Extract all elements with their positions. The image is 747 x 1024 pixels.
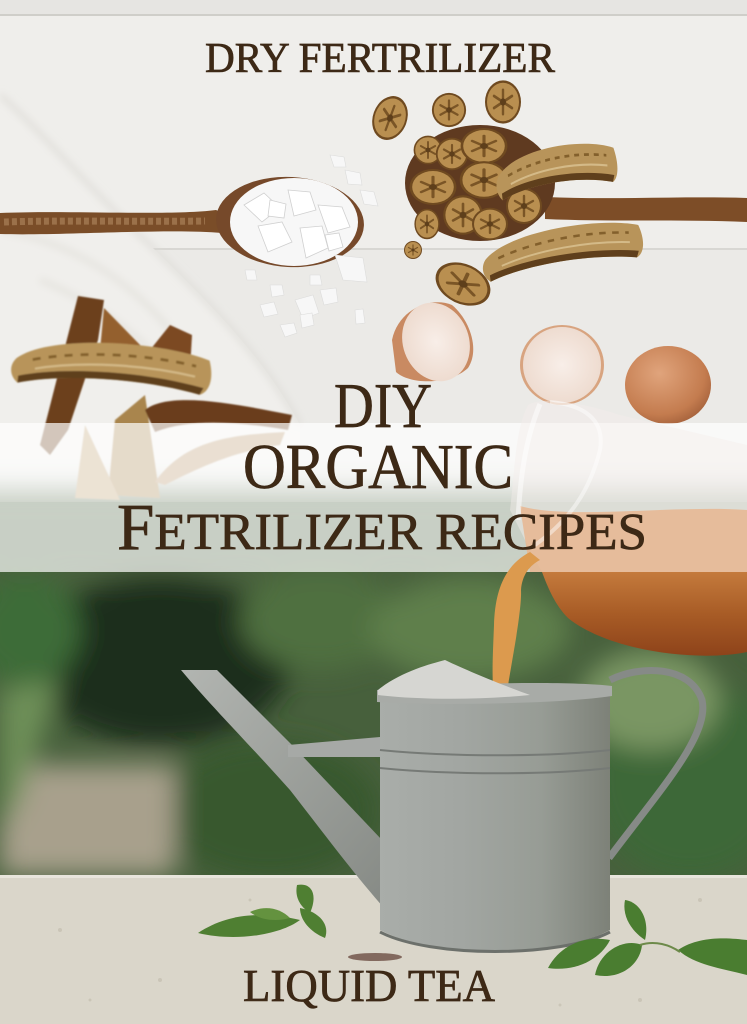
translucent title band <box>0 423 747 572</box>
top background: white wood planks <box>0 0 747 510</box>
body <box>380 695 610 951</box>
stream of tea <box>493 552 540 686</box>
brace <box>288 737 380 757</box>
spout <box>181 670 384 908</box>
table surface <box>0 875 747 1024</box>
egg shell right <box>520 325 604 405</box>
handle <box>609 670 703 858</box>
rim <box>377 683 612 704</box>
title: DIY <box>334 370 432 441</box>
heading: liquid tea: LIQUID TEA <box>243 960 495 1011</box>
title <box>117 370 647 564</box>
loose dried banana chips <box>366 80 521 314</box>
egg shell left <box>391 293 481 391</box>
wooden spoon with white salt flakes <box>0 155 378 337</box>
basil sprig left <box>198 885 326 938</box>
galvanized watering can <box>181 660 703 952</box>
lower background: blurred garden <box>0 490 747 880</box>
whole brown egg <box>625 346 711 424</box>
heading: dry fertilizer: DRY FERTRILIZER <box>205 36 555 82</box>
title: FETRILIZER RECIPES <box>117 491 647 564</box>
basil sprig right <box>548 900 747 976</box>
wooden spoon with banana chips <box>405 125 747 283</box>
glass jar pouring tea <box>510 401 747 656</box>
pile of dried banana slices <box>10 296 292 500</box>
white linen cloth <box>0 95 300 510</box>
title: ORGANIC <box>243 431 513 502</box>
